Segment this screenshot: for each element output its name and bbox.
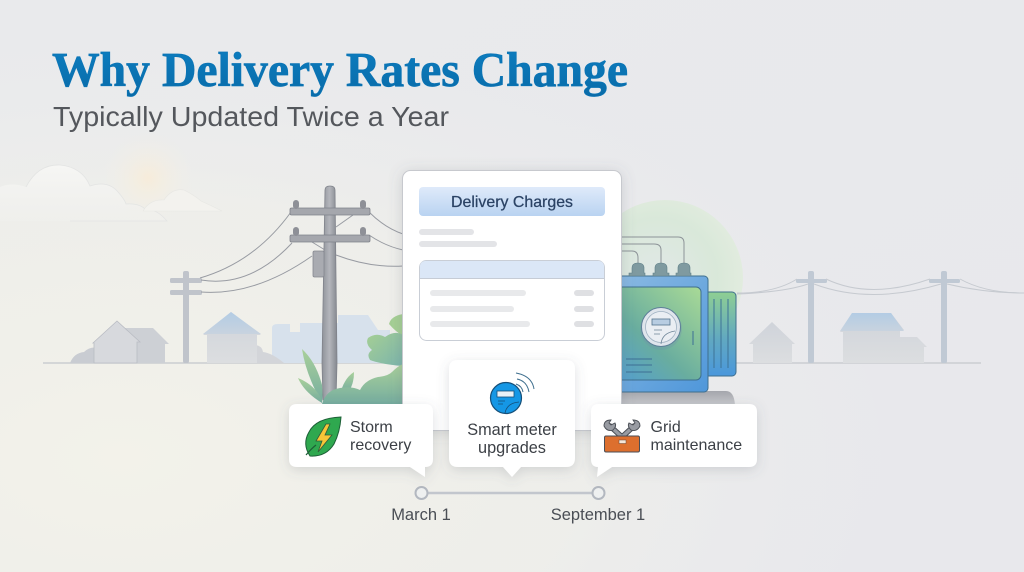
label: recovery [350, 437, 411, 454]
right house one [749, 322, 795, 363]
September 1 marker [592, 487, 604, 499]
callout: grid maintenance [591, 404, 757, 477]
label: Smart meter [467, 421, 557, 439]
label: upgrades [478, 439, 546, 457]
transformer side fins [704, 292, 736, 376]
icon: smart meter with signal [490, 373, 534, 414]
document heading [419, 187, 605, 216]
label: Storm [350, 419, 393, 436]
timeline [391, 487, 645, 524]
transformer base [620, 391, 735, 405]
sun glow [102, 132, 194, 224]
right house two [840, 313, 927, 363]
transformer wires [620, 237, 684, 264]
small pole left [170, 271, 202, 363]
right pole one [796, 271, 827, 363]
right distant scene [737, 271, 1024, 363]
transformer green halo [587, 200, 743, 356]
callout: storm recovery [289, 404, 433, 477]
March 1 marker [416, 487, 428, 499]
clouds [0, 165, 222, 221]
main utility pole [290, 186, 370, 400]
document heading: Delivery Charges [451, 194, 573, 211]
label: maintenance [650, 437, 742, 454]
document panel [402, 170, 622, 430]
bushes [298, 314, 403, 404]
March 1 label: March 1 [391, 506, 451, 524]
title: Why Delivery Rates Change [52, 42, 628, 97]
transformer body with meter [600, 263, 708, 392]
placeholder text lines [419, 229, 497, 247]
label: Grid [650, 419, 681, 436]
icon: leaf with bolt [306, 417, 341, 456]
callout: smart meter upgrades [449, 360, 575, 477]
distant blue skyline [272, 315, 390, 363]
houses left [70, 312, 284, 363]
power lines left [200, 212, 403, 292]
right power lines [737, 279, 1024, 294]
charges table [420, 260, 604, 340]
icon: toolbox with wrenches [604, 420, 640, 452]
right pole two [929, 271, 960, 363]
ground line left and right [43, 362, 981, 364]
September 1 label: September 1 [551, 506, 645, 524]
subtitle: Typically Updated Twice a Year [53, 101, 449, 132]
